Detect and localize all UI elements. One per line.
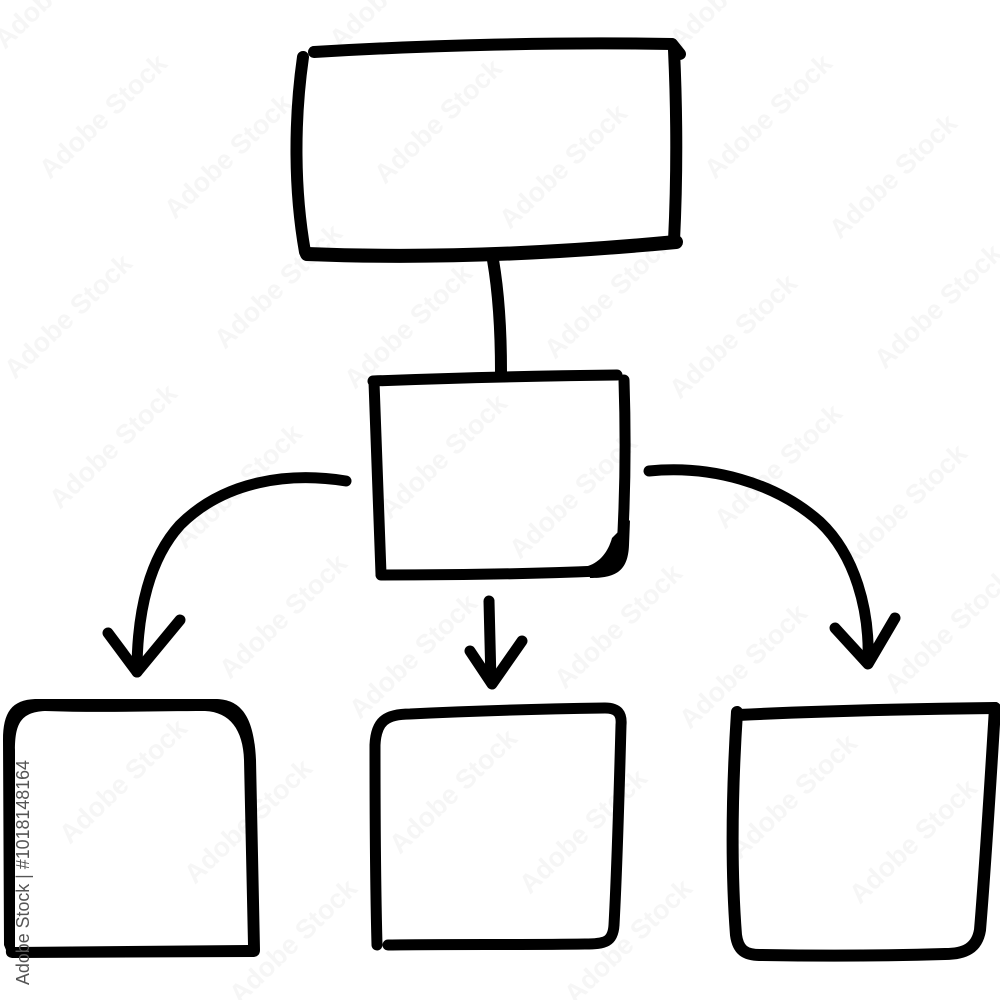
background watermark pattern: Adobe Stock [833,437,974,574]
background watermark pattern: Adobe Stock [213,547,354,684]
background watermark pattern: Adobe Stock [158,87,299,224]
background watermark pattern: Adobe Stock [513,762,654,899]
background watermark pattern: Adobe Stock [208,217,349,354]
background watermark pattern: Adobe Stock [823,107,964,244]
arrow: centre [470,601,522,684]
flowchart bottom right box [733,708,995,956]
background watermark pattern: Adobe Stock [168,417,309,554]
background watermark pattern: Adobe Stock [383,722,524,859]
background watermark pattern: Adobe Stock [663,267,804,404]
background watermark pattern: Adobe Stock [503,427,644,564]
background watermark pattern: Adobe Stock [373,387,514,524]
background watermark pattern: Adobe Stock [548,557,689,694]
background watermark pattern: Adobe Stock [43,377,184,514]
watermark label: Adobe Stock | #1018148164 [13,760,33,985]
background watermark pattern: Adobe Stock [343,587,484,724]
background watermark pattern: Adobe Stock [33,47,174,184]
flowchart middle box [373,375,630,578]
arrow: left [108,478,346,672]
background watermark pattern: Adobe Stock [538,227,679,364]
background watermark pattern: Adobe Stock [53,712,194,849]
background watermark pattern: Adobe Stock [178,752,319,889]
background watermark pattern: Adobe Stock [698,47,839,184]
background watermark pattern: Adobe Stock [723,727,864,864]
arrow: right [649,470,895,664]
connector line [493,260,501,372]
background watermark pattern: Adobe Stock [493,97,634,234]
background watermark pattern: Adobe Stock [0,247,139,384]
flowchart bottom centre box [375,708,621,945]
background watermark pattern: Adobe Stock [368,52,509,189]
background watermark pattern: Adobe Stock [708,397,849,534]
flowchart bottom left box [3,699,260,958]
background watermark pattern: Adobe Stock [338,257,479,394]
background watermark pattern: Adobe Stock [673,597,814,734]
flowchart top box [296,43,680,256]
background watermark pattern: Adobe Stock [843,772,984,909]
